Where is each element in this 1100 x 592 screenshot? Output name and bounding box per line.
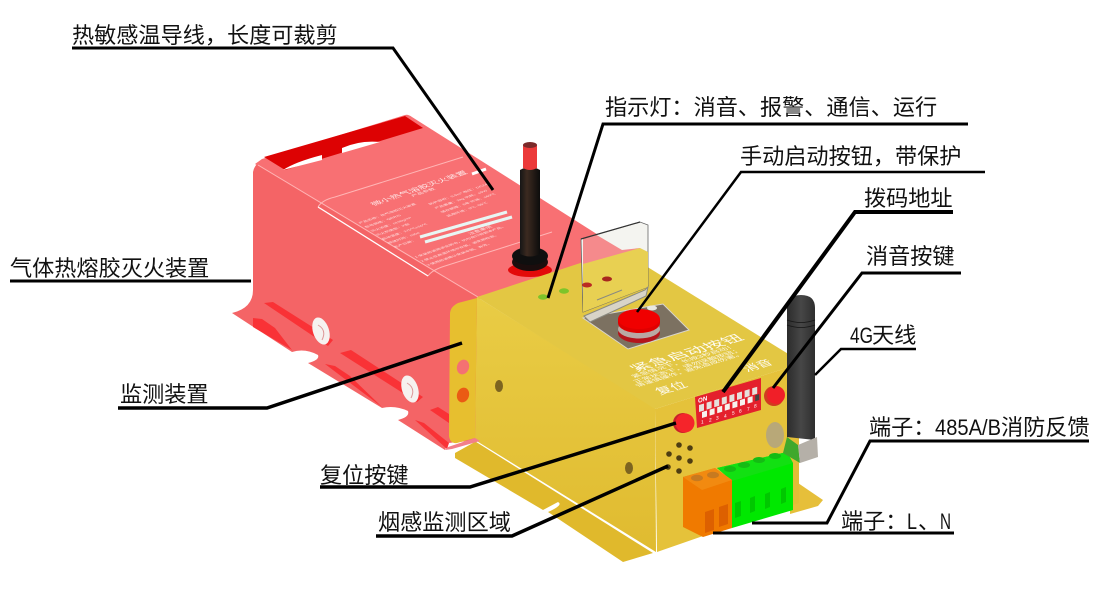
callout: thermal wire [72, 23, 493, 190]
lower flange stripes [253, 302, 449, 449]
left mounting flange [455, 440, 653, 562]
orange terminal block [683, 468, 732, 537]
side screw holes [495, 380, 633, 474]
product label text: 2.禁止在高温环境中存放，请定期检查。 [419, 233, 500, 262]
product label text: 产品重量：1kg 功耗：≤5W [433, 189, 489, 209]
DIP switch block: ON [698, 395, 708, 405]
callout: L N terminals: 端子： [841, 509, 907, 534]
green terminal block [717, 452, 793, 528]
product label text: 防护容积：0.5m³ 电压：DC24V [427, 181, 492, 205]
smoke detection holes [665, 442, 693, 474]
callout: manual start button [637, 144, 985, 312]
callout: indicator lights: 指示灯：消音、报警、通信、运行 [605, 95, 937, 120]
callout: smoke detection area [376, 466, 668, 536]
callout: mute key [773, 244, 961, 388]
DIP switch block: 3 [716, 415, 719, 422]
callout: monitoring device [118, 343, 462, 408]
product label text: 产品参数 [409, 186, 438, 198]
callout: 485 terminals: 端子： [869, 415, 935, 440]
product label text: 喷放时间：≤30s [386, 231, 421, 244]
emergency button caption: 正常状态下，请勿误触按钮； [630, 347, 744, 384]
product label text: 型号规格：QRR/S [363, 213, 402, 228]
callout: 4G antenna [815, 323, 916, 375]
rear recess with cut-outs [264, 116, 423, 170]
end plate holes [455, 358, 471, 404]
product label text: 适用环境：0℃~55℃ [445, 201, 489, 217]
callout: L N terminals: L [907, 509, 917, 534]
mute button [764, 386, 785, 406]
DIP switch block [695, 378, 761, 428]
button base plate [583, 304, 689, 349]
callout: monitoring device: 监测装置 [120, 382, 209, 407]
callout: L N terminals: N [940, 509, 951, 534]
callout: 485 terminals: 消防反馈 [1001, 415, 1090, 440]
callout: thermal wire: 热敏感温导线，长度可裁剪 [72, 23, 338, 48]
callout: DIP address [723, 186, 953, 392]
product label text: 产品名称：热气溶胶灭火装置 [357, 202, 417, 224]
callout: smoke detection area: 烟感监测区域 [378, 510, 511, 535]
end plate [449, 298, 477, 443]
mounting grommets [309, 315, 422, 405]
emergency button caption: 紧急情况下，长按3秒启动！ [628, 343, 738, 379]
temperature sensing post [508, 142, 552, 277]
product label text: 灭火剂类型：K型 [374, 222, 411, 236]
side face [475, 297, 656, 552]
antenna [783, 295, 818, 463]
product label text: 生产日期： [392, 238, 417, 248]
product label text: 3.使用前请确认安装牢固、有效。 [425, 241, 493, 266]
red body side face [232, 160, 480, 450]
callout: 485 terminals [752, 415, 1090, 523]
yellow monitoring device [445, 222, 823, 562]
callout: L N terminals [713, 509, 954, 534]
status indicator lights [538, 276, 612, 300]
callout: manual start button: 手动启动按钮，带保护 [740, 144, 961, 169]
callout: indicator lights [548, 95, 968, 298]
DIP switch block: 6 [739, 408, 742, 415]
DIP switch block: 2 [709, 417, 712, 424]
product label text: 微小热气溶胶灭火装置 [368, 169, 470, 207]
top face [477, 250, 790, 409]
reset button [673, 413, 694, 433]
callout: L N terminals: 、 [918, 509, 940, 534]
callout: 485 terminals: 485A/B [935, 415, 1001, 440]
right mounting flange [790, 480, 823, 514]
callout: reset key: 复位按键 [320, 463, 409, 488]
product label text: 启动温度：170℃±10℃ [380, 222, 429, 240]
callout: gas extinguisher: 气体热熔胶灭火装置 [10, 256, 209, 281]
DIP switch block: 4 [724, 413, 727, 420]
callout: 4G antenna: 天线 [872, 323, 916, 348]
fold edge lines [258, 157, 552, 297]
product label text: 灭火浓度：≤130g/m³ [369, 216, 413, 232]
DIP switch block: 8 [754, 403, 757, 410]
emergency button caption: 紧急启动按钮 [626, 333, 748, 374]
callout: mute key: 消音按键 [866, 244, 955, 269]
reset caption: 复位 [651, 379, 691, 397]
antenna mount nut [766, 422, 784, 448]
transparent protective cover [581, 222, 648, 322]
callout: DIP address: 拨码地址 [864, 186, 953, 211]
callout: 4G antenna: 4G [850, 323, 873, 348]
callout: reset key [320, 423, 676, 488]
mute caption: 消音 [739, 357, 776, 374]
DIP switch block: 7 [747, 406, 750, 413]
product label text: 1.安装前请阅读说明书，切勿自行拆卸本产品。 [413, 224, 507, 258]
DIP switch block: 1 [701, 419, 704, 426]
red emergency button [618, 306, 660, 343]
emergency button caption: 请谨慎操作，避免造成伤害。 [632, 351, 746, 388]
red body top face [255, 115, 622, 298]
DIP switch block: 5 [732, 410, 735, 417]
product label text: 储存期限：8年 环境：≤60℃ [439, 192, 497, 213]
product label text [357, 169, 512, 266]
red extinguisher device [232, 115, 622, 450]
product label text: 注意事项 [466, 224, 494, 236]
white label edge [318, 207, 428, 276]
front panel [655, 367, 798, 552]
